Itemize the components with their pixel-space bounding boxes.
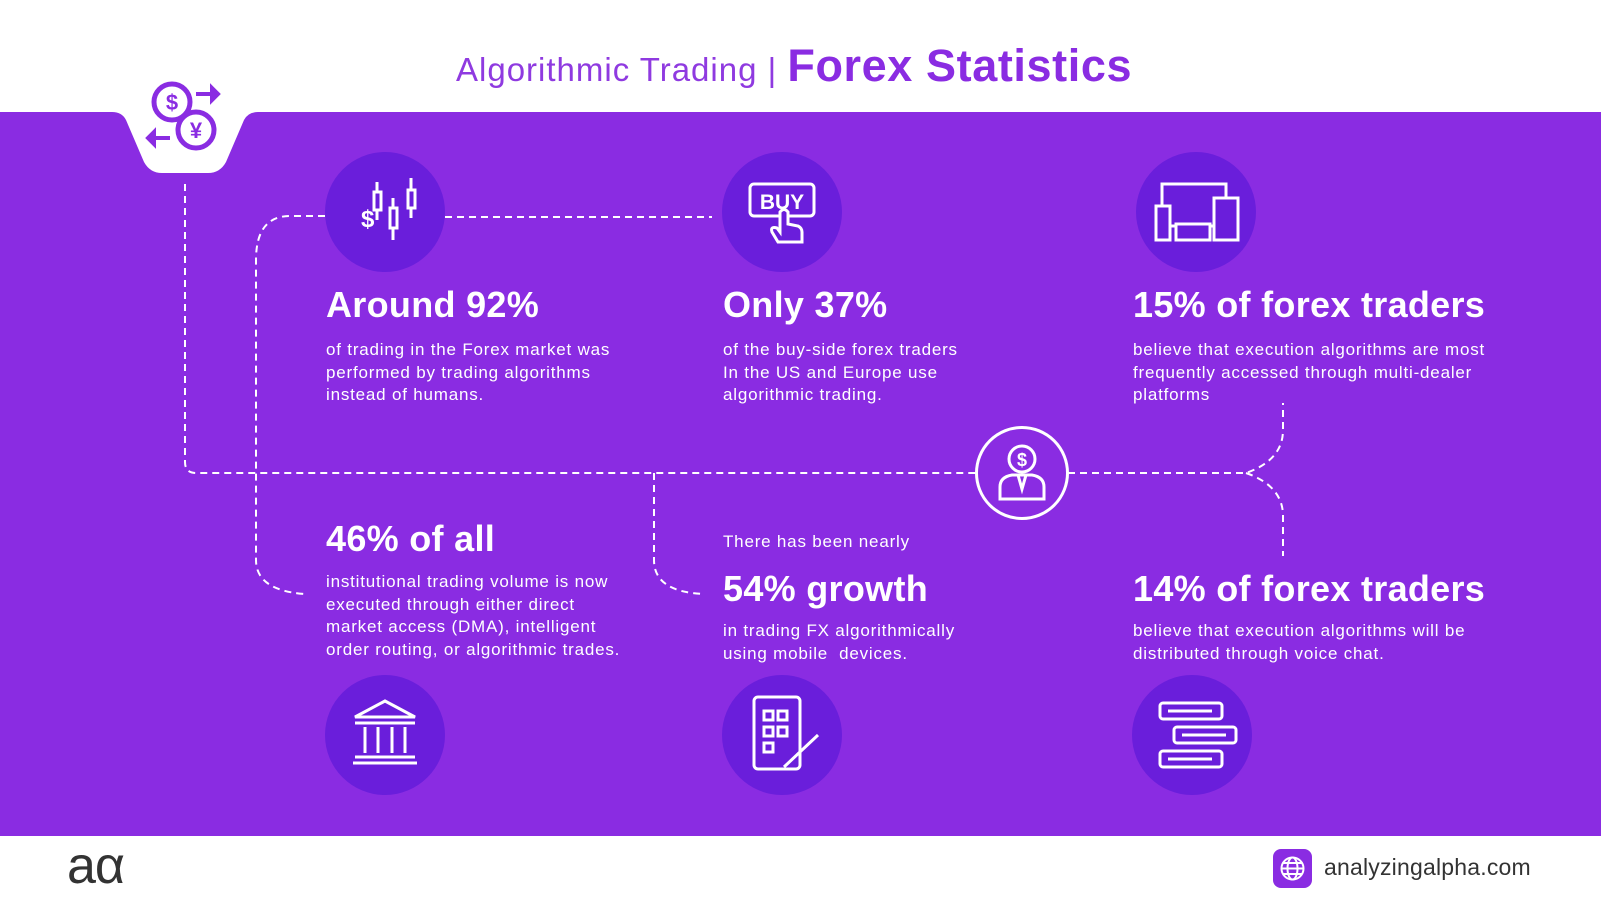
text: performed by trading algorithms	[326, 362, 591, 382]
center icon: trader: $	[1017, 450, 1027, 470]
notch tab with currency icon: ¥	[190, 118, 203, 143]
text: market access (DMA), intelligent	[326, 617, 596, 636]
text: using mobile devices.	[723, 644, 908, 662]
icon: buy button	[722, 152, 842, 272]
icon: mobile	[722, 675, 842, 795]
text: believe that execution algorithms will be	[1133, 621, 1465, 640]
icon: buy button: BUY	[760, 191, 804, 214]
notch tab with currency icon	[112, 82, 258, 173]
text: platforms	[1133, 385, 1210, 404]
center icon: trader	[975, 426, 1069, 520]
text: order routing, or algorithmic trades.	[326, 640, 620, 658]
text: of trading in the Forex market was	[326, 340, 610, 359]
text: institutional trading volume is now	[326, 572, 608, 591]
stat 2: Only 37%	[723, 284, 887, 325]
text: believe that execution algorithms are most	[1133, 340, 1485, 359]
text: of the buy-side forex traders	[723, 340, 958, 359]
icon: bank	[325, 675, 445, 795]
icon: candlestick	[325, 152, 445, 272]
footer logo: aα	[67, 837, 124, 895]
text: In the US and Europe use	[723, 362, 938, 382]
text: algorithmic trading.	[723, 385, 883, 404]
text: frequently accessed through multi-dealer	[1133, 362, 1472, 382]
footer website	[1273, 849, 1531, 888]
stat 4: 46% of all	[326, 518, 495, 559]
stat 3: 15% of forex traders	[1133, 284, 1485, 325]
text: instead of humans.	[326, 385, 484, 404]
icon: devices	[1136, 152, 1256, 272]
stat 1: Around 92%	[326, 284, 539, 325]
text: 54% growth	[723, 568, 928, 609]
text: executed through either direct	[326, 594, 575, 614]
text: in trading FX algorithmically	[723, 621, 955, 640]
stat 6: 14% of forex traders	[1133, 568, 1485, 609]
icon: candlestick: $	[361, 206, 375, 233]
icon: chat	[1132, 675, 1252, 795]
text: distributed through voice chat.	[1133, 644, 1385, 662]
notch tab with currency icon: $	[166, 90, 178, 115]
footer website: analyzingalpha.com	[1324, 854, 1531, 880]
title: Algorithmic Trading | Forex Statistics	[456, 40, 1132, 91]
stat 5: There has been nearly	[723, 532, 910, 551]
